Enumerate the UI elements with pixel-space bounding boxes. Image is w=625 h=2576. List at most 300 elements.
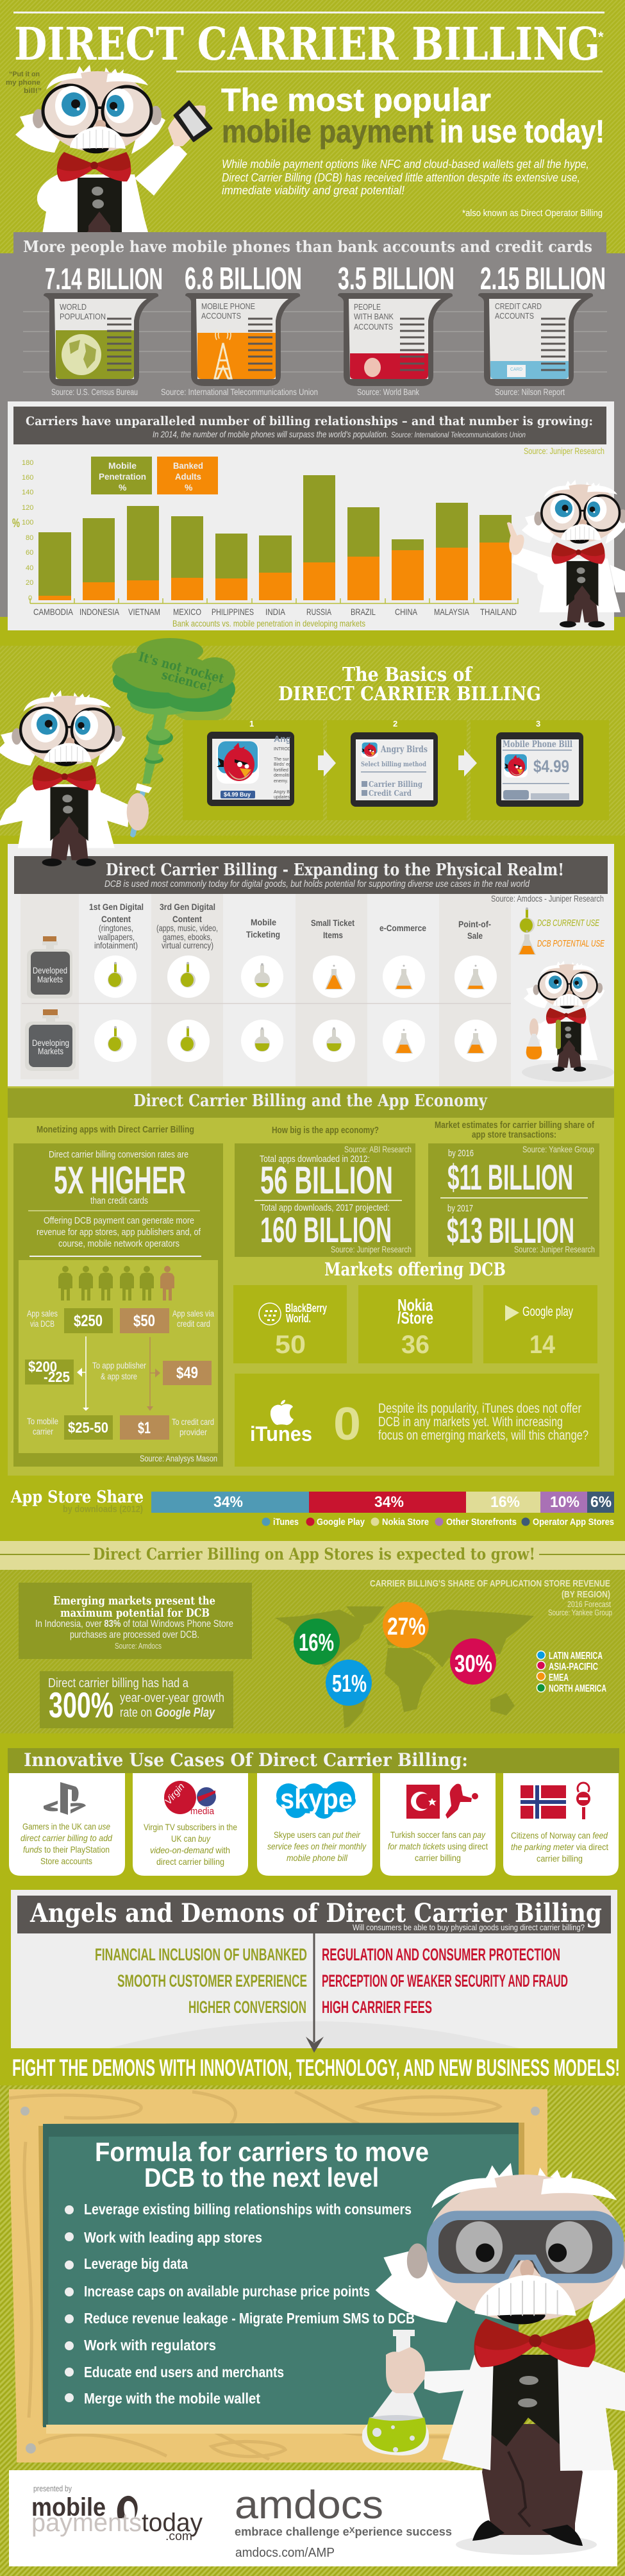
revenue flow diagram: -225 (44, 1368, 70, 1385)
bullet list: Educate end users and merchants (84, 2364, 284, 2380)
chart source: Source: Juniper Research (524, 446, 604, 456)
column headers: (ringtones, (99, 923, 133, 933)
people icons (58, 1266, 174, 1301)
stat: mobile phone accounts: ACCOUNTS (201, 311, 241, 321)
asterisk: * (598, 29, 604, 45)
box: app economy size: Source: ABI Research (344, 1144, 412, 1154)
stat: 5x higher: 5X HIGHER (54, 1159, 186, 1202)
card: skype (257, 1773, 372, 1876)
country labels: MALAYSIA (434, 607, 470, 617)
country labels: MEXICO (173, 607, 201, 617)
scientist with flasks (524, 961, 604, 1072)
heading bar: Direct Carrier Billing - Expanding to the Physical Realm! (106, 861, 564, 880)
stat: people with bank accounts (338, 262, 454, 397)
step 1: INTROD (274, 747, 291, 752)
stacked bar: 34% (213, 1494, 243, 1511)
box: monetizing apps (13, 1143, 223, 1467)
basics heading: DIRECT CARRIER BILLING (278, 683, 541, 705)
icon: turkish flag and player (406, 1784, 478, 1819)
revenue flow diagram (19, 1260, 218, 1453)
region bubbles: 16% (299, 1629, 334, 1656)
legend: mobile penetration: Mobile (108, 460, 137, 471)
box: monetizing apps: revenue for app stores, app publishers and, of (37, 1227, 201, 1238)
revenue flow diagram: & app store (101, 1371, 137, 1381)
scientist with goggles and flask (362, 2163, 625, 2555)
region legend (537, 1651, 606, 1694)
heading bar (14, 856, 608, 894)
card: norway parking: the parking meter via direct (511, 1842, 608, 1852)
column headers: Content (101, 914, 131, 924)
stat: mobile phone accounts: Source: International Telecommunications Union (161, 387, 318, 397)
step 1: Angry Bi (274, 790, 291, 795)
step 1 (207, 719, 294, 806)
card: playstation: funds to their PlayStation (23, 1844, 110, 1855)
market: google play: Google play (522, 1304, 573, 1319)
bullet list (65, 2201, 415, 2407)
country labels: VIETNAM (128, 607, 160, 617)
region bubbles: 30% (454, 1651, 492, 1678)
panel: billing relationships chart (8, 401, 614, 630)
footer: sponsors (9, 2470, 617, 2566)
revenue flow diagram: via DCB (30, 1318, 54, 1329)
legend: potential use (518, 930, 605, 955)
step 2 (351, 719, 438, 807)
market: nokia store: /Store (397, 1308, 433, 1327)
intro paragraph (222, 158, 589, 197)
heading bar: Innovative Use Cases Of Direct Carrier Billing: (24, 1749, 468, 1771)
stat: credit card accounts: CREDIT CARD (495, 301, 542, 311)
heading bar: DCB is used most commonly today for digital goods, but holds potential for supporting diverse use cases in the real world (104, 879, 530, 889)
market: blackberry world: 50 (275, 1331, 306, 1359)
board (43, 2123, 519, 2434)
icon: skype logo: skype (280, 1783, 353, 1815)
card: playstation (9, 1773, 125, 1876)
card: skype: Skype users can put their (274, 1830, 361, 1840)
icon: virgin media logo: media (190, 1806, 215, 1817)
revenue flow diagram: To mobile (27, 1416, 58, 1426)
callout: emerging markets (19, 1583, 252, 1659)
box: monetizing apps: than credit cards (90, 1195, 148, 1206)
legend: banked adults: Banked (173, 460, 203, 471)
region bubbles: 27% (387, 1613, 426, 1640)
revenue flow diagram: $250 (74, 1312, 103, 1330)
callout: emerging markets: In Indonesia, over 83% of total Windows Phone Store (35, 1619, 233, 1629)
band: expected to grow: Direct Carrier Billing on App Stores is expected to grow! (93, 1545, 535, 1563)
speech: put it on my phone bill: bill!” (24, 87, 42, 95)
wood frame (9, 2089, 547, 2462)
market: itunes: DCB in any markets yet. With increasing (378, 1415, 563, 1429)
stacked bar (151, 1492, 614, 1513)
speech: put it on my phone bill (6, 71, 42, 95)
column subheads (37, 1120, 595, 1140)
flasks: developing row (94, 1020, 497, 1062)
column headers: e-Commerce (379, 923, 426, 933)
logo: mobile payments today: presented by (33, 2484, 72, 2493)
stacked bar: 34% (374, 1494, 404, 1511)
column headers: infotainment) (94, 940, 138, 950)
stat: world population: POPULATION (60, 312, 106, 321)
panel: app economy (8, 1086, 614, 1476)
card: playstation: direct carrier billing to add (21, 1833, 113, 1843)
card: skype: service fees on their monthly (267, 1841, 367, 1851)
panel: phones vs bank accounts (0, 232, 625, 617)
intro paragraph: Direct Carrier Billing (DCB) has received little attention despite its extensive use, (222, 171, 580, 184)
step 1: Ang (274, 734, 291, 744)
markets offering heading: Markets offering DCB (324, 1259, 506, 1280)
bullet list: Reduce revenue leakage - Migrate Premium SMS to DCB (84, 2310, 415, 2327)
market: blackberry world: World. (286, 1312, 311, 1325)
legend (262, 1517, 614, 1528)
scientist pointing at chart (507, 480, 625, 628)
logo: amdocs: perience success (354, 2525, 452, 2538)
stat: credit card accounts: ACCOUNTS (495, 311, 534, 321)
revenue flow diagram: App sales (27, 1308, 58, 1318)
bottle: developed markets: Markets (37, 974, 63, 984)
card: virgin media: Virgin TV subscribers in the (144, 1822, 237, 1832)
chart title: carrier billing share by region (370, 1578, 612, 1617)
legend: Google Play (317, 1517, 365, 1528)
box: market estimates: Source: Juniper Research (514, 1244, 595, 1254)
stat: credit card accounts (478, 262, 606, 397)
column headers: Small Ticket (311, 918, 354, 928)
column headers (89, 902, 491, 950)
legend: mobile penetration: % (119, 482, 127, 492)
chart caption: Bank accounts vs. mobile penetration in developing markets (172, 618, 365, 628)
stat: credit card accounts: CARD (510, 367, 522, 372)
country labels: BRAZIL (351, 607, 376, 617)
step 1: 1 (249, 719, 254, 728)
country labels: THAILAND (480, 607, 517, 617)
footnote: *also known as Direct Operator Billing (462, 208, 603, 219)
box: monetizing apps: Source: Analysys Mason (140, 1453, 217, 1463)
stat: world population: Source: U.S. Census Bureau (51, 387, 138, 397)
heading: More people have mobile phones than bank accounts and credit cards (23, 237, 592, 256)
step 2: 2 (393, 719, 397, 728)
region legend: EMEA (549, 1672, 569, 1683)
revenue flow diagram: App sales via (172, 1308, 214, 1318)
speech: put it on my phone bill: “Put it on (9, 71, 40, 78)
scientist with phone (15, 65, 212, 270)
revenue flow diagram: carrier (33, 1426, 53, 1436)
column headers: Ticketing (246, 929, 280, 939)
box: app economy size: 160 BILLION (260, 1209, 392, 1250)
world map (275, 1606, 534, 1728)
box: app economy size: Total app downloads, 2017 projected: (260, 1202, 390, 1213)
arrow (458, 749, 477, 777)
box: app economy size: 56 BILLION (260, 1159, 393, 1202)
chart heading bar: Source: International Telecommunications Union (391, 430, 526, 439)
region legend: ASIA-PACIFIC (549, 1662, 598, 1672)
card: turkish soccer: Turkish soccer fans can pay (390, 1830, 486, 1840)
stat: world population: WORLD (60, 302, 87, 312)
cloud text: It's not rocket (137, 649, 226, 686)
column headers: 3rd Gen Digital (160, 902, 215, 912)
heading bar (8, 1748, 619, 1773)
column headers: Point-of- (458, 919, 491, 929)
revenue flow diagram: To credit card (172, 1417, 214, 1427)
box: monetizing apps: course, mobile network operators (58, 1238, 179, 1249)
cloud text: science! (160, 667, 213, 695)
step 1: The sur (274, 757, 289, 762)
column headers: (apps, music, video, (156, 923, 218, 933)
angels list (95, 1945, 307, 2017)
revenue flow diagram: credit card (177, 1318, 210, 1329)
card: norway parking: Citizens of Norway can feed (511, 1830, 608, 1840)
bars (38, 475, 512, 600)
market: blackberry world (233, 1285, 347, 1363)
panel: expanding to the physical realm (8, 844, 614, 1086)
section: app store share: App Store Share (10, 1488, 144, 1507)
step 1: updates (274, 795, 290, 800)
heading bar: Will consumers be able to buy physical goods using direct carrier billing? (353, 1923, 585, 1932)
revenue flow diagram: $50 (133, 1312, 155, 1330)
revenue flow diagram: $1 (138, 1419, 151, 1437)
angels list: SMOOTH CUSTOMER EXPERIENCE (117, 1971, 307, 1991)
logo: mobile payments today: payments (31, 2509, 142, 2537)
revenue flow diagram: $200 (28, 1358, 57, 1375)
column headers: virtual currency) (162, 940, 213, 950)
stat: world population: 7.14 BILLION (45, 262, 163, 296)
stat: world population (44, 262, 163, 397)
card: turkish soccer: for match tickets using direct (388, 1841, 488, 1851)
y axis: 80 (26, 534, 33, 542)
logo: mobile payments today: today (142, 2509, 203, 2537)
header (13, 12, 604, 219)
card: norway parking: carrier billing (537, 1853, 583, 1864)
step 2: Angry Birds (380, 745, 428, 755)
icon: flask (362, 2330, 429, 2455)
bullet list: Merge with the mobile wallet (84, 2390, 260, 2407)
card: norway parking (503, 1773, 619, 1876)
market: google play: 14 (529, 1331, 556, 1359)
country labels: CAMBODIA (33, 607, 74, 617)
column subheads: app store transactions: (472, 1129, 556, 1140)
stacked bar: 16% (490, 1494, 520, 1511)
logo: amdocs: embrace challenge e (235, 2525, 348, 2538)
heading bar: Direct Carrier Billing and the App Economy (133, 1091, 488, 1111)
step 3: Mobile Phone Bill (503, 739, 572, 750)
y axis: 160 (22, 474, 33, 482)
y axis: 140 (22, 489, 33, 496)
legend: iTunes (273, 1517, 299, 1528)
flasks: developed row (94, 955, 497, 998)
y axis: 180 (22, 459, 33, 467)
stat: people with bank accounts: Source: World Bank (357, 387, 420, 397)
logo: mobile payments today: mobile (31, 2493, 106, 2521)
board heading: Formula for carriers to move (95, 2137, 429, 2167)
arrow (318, 749, 336, 777)
step 1: enemy. (274, 779, 288, 784)
callout: 300 percent growth: Direct carrier billing has had a (48, 1676, 189, 1690)
bottle: developing markets (25, 1009, 76, 1071)
stat: people with bank accounts: 3.5 BILLION (338, 262, 454, 296)
stat: credit card accounts: Source: Nilson Report (495, 387, 565, 397)
market: blackberry world: BlackBerry (285, 1302, 327, 1315)
logo: mobile payments today (31, 2484, 203, 2543)
box: app economy size (235, 1143, 415, 1257)
thought cloud: it's not rocket science (112, 638, 235, 784)
box: monetizing apps: Direct carrier billing conversion rates are (49, 1149, 188, 1160)
callout: emerging markets: maximum potential for DCB (60, 1606, 210, 1620)
bottle: developed markets (27, 936, 72, 998)
card: virgin media: video-on-demand with (150, 1845, 230, 1855)
market: itunes: 0 (333, 1399, 361, 1450)
logo: amdocs: amdocs (235, 2483, 383, 2527)
logo: mobile payments today: .com (165, 2530, 192, 2543)
board heading: DCB to the next level (144, 2162, 379, 2193)
callout: emerging markets: purchases are processed over DCB. (70, 1629, 199, 1640)
country labels: INDONESIA (79, 607, 120, 617)
callout: 300 percent growth: 300% (49, 1685, 113, 1725)
revenue flow diagram: $49 (176, 1364, 198, 1382)
card: virgin media (133, 1773, 248, 1876)
logo: amdocs (235, 2483, 452, 2560)
bullet list: Work with leading app stores (84, 2229, 262, 2246)
logo: amdocs: amdocs.com/AMP (235, 2546, 335, 2560)
column headers: games, ebooks, (163, 932, 212, 942)
callout: emerging markets: Emerging markets present the (53, 1594, 215, 1608)
legend: banked adults: % (185, 482, 193, 492)
stat: mobile phone accounts: MOBILE PHONE (201, 301, 255, 311)
board heading (95, 2137, 429, 2193)
market: nokia store (358, 1285, 472, 1363)
step 2: Select billing method (361, 761, 426, 768)
callout: 300 percent growth: year-over-year growth (120, 1691, 224, 1705)
card: turkish soccer (380, 1773, 496, 1876)
column headers: 1st Gen Digital (89, 902, 144, 912)
chart title: carrier billing share by region: 2016 Forecast (567, 1599, 611, 1609)
section: app store share: by downloads (2012) (63, 1504, 143, 1515)
step 3 (496, 719, 583, 807)
step 1: Birds' eg (274, 762, 291, 767)
revenue flow diagram: provider (179, 1427, 207, 1437)
chart heading bar: Carriers have unparalleled number of billing relationships – and that number is growing: (26, 414, 593, 428)
box: market estimates: by 2017 (447, 1203, 473, 1214)
box: app economy size: Total apps downloaded in 2012: (260, 1154, 370, 1165)
stat: mobile phone accounts: 6.8 BILLION (185, 262, 302, 296)
step 2: Carrier Billing (369, 780, 423, 789)
legend: banked adults: Adults (175, 471, 201, 482)
revenue flow diagram: To app publisher (92, 1360, 146, 1370)
market: nokia store: Nokia (397, 1295, 433, 1315)
box: market estimates: by 2016 (448, 1148, 474, 1159)
step 3: $4.99 (533, 757, 569, 776)
card: skype: mobile phone bill (287, 1853, 348, 1863)
y axis: 120 (22, 504, 33, 512)
market: nokia store: 36 (401, 1331, 429, 1359)
card: turkish soccer: carrier billing (415, 1853, 461, 1863)
column headers: Items (323, 930, 343, 940)
column headers: Content (172, 914, 202, 924)
revenue flow diagram: $25-50 (68, 1419, 108, 1436)
column subheads: How big is the app economy? (272, 1125, 379, 1136)
step 1: fortified (274, 768, 288, 773)
bottle: developing markets: Markets (38, 1046, 63, 1056)
legend: mobile penetration: Penetration (99, 471, 146, 482)
section: innovative use cases (8, 1748, 619, 1876)
chart title: carrier billing share by region: (BY REGION) (562, 1589, 610, 1600)
icon: playstation logo (44, 1782, 86, 1815)
country labels: INDIA (265, 607, 286, 617)
y axis: 60 (26, 549, 33, 557)
stat: mobile phone accounts (161, 262, 318, 397)
market: itunes: iTunes (250, 1422, 312, 1445)
panel: angels and demons (11, 1890, 617, 2048)
country labels: PHILIPPINES (212, 607, 254, 617)
legend: Other Storefronts (446, 1517, 517, 1528)
bullet list: Increase caps on available purchase price points (84, 2283, 370, 2300)
speech: put it on my phone bill: my phone (6, 79, 40, 87)
icon: apple (271, 1400, 294, 1425)
region bubbles (294, 1602, 496, 1706)
step 2: Credit Card (369, 789, 412, 798)
stat: people with bank accounts: ACCOUNTS (354, 322, 393, 332)
demons list: HIGH CARRIER FEES (322, 1998, 432, 2017)
step 3: 3 (536, 719, 540, 728)
column subheads: Monetizing apps with Direct Carrier Billing (37, 1124, 194, 1135)
band: expected to grow (0, 1541, 625, 1570)
legend: banked adults (157, 457, 218, 494)
section: app store share (10, 1488, 614, 1528)
subtitle line 2: mobile payment (222, 114, 433, 149)
country labels: CHINA (395, 607, 418, 617)
card: virgin media: direct carrier billing (156, 1856, 224, 1867)
bullet list: Leverage big data (84, 2255, 188, 2272)
chart heading bar: In 2014, the number of mobile phones will surpass the world's population. (153, 429, 388, 439)
y axis (12, 459, 33, 602)
bullet list: Work with regulators (84, 2337, 216, 2353)
region bubbles: 51% (332, 1671, 367, 1697)
market: itunes (235, 1374, 599, 1467)
y axis: 20 (26, 579, 33, 587)
column headers: wallpapers, (97, 932, 135, 942)
panel: three steps (183, 719, 609, 820)
box: market estimates: Source: Yankee Group (522, 1144, 594, 1154)
angels list: HIGHER CONVERSION (188, 1998, 306, 2017)
stat: people with bank accounts: WITH BANK (354, 312, 394, 321)
intro paragraph: While mobile payment options like NFC and cloud-based wallets get all the hype, (222, 158, 589, 171)
floor shadow (522, 1063, 614, 1082)
callout: emerging markets: Source: Amdocs (115, 1641, 162, 1651)
legend: current use (519, 907, 600, 933)
y axis: 40 (26, 564, 33, 572)
column headers: Sale (467, 930, 483, 941)
country labels: RUSSIA (306, 607, 331, 617)
callout: 300 percent growth (40, 1671, 233, 1728)
icon: virgin media logo (163, 1781, 216, 1817)
basics heading (278, 664, 541, 705)
step 1: demoliti (274, 773, 290, 778)
icon: virgin media logo: Virgin (163, 1781, 187, 1807)
card: playstation: Gamers in the UK can use (22, 1821, 110, 1831)
bottle: developing markets: Developing (32, 1038, 69, 1048)
stacked bar: 10% (550, 1494, 579, 1511)
legend: Operator App Stores (533, 1517, 614, 1528)
card: playstation: Store accounts (40, 1856, 92, 1866)
angels list: FINANCIAL INCLUSION OF UNBANKED (95, 1945, 307, 1964)
chart heading bar (13, 407, 606, 444)
subtitle line 1: The most popular (221, 82, 491, 118)
heading bar (8, 1088, 614, 1118)
icon: norwegian flag and parking meter (521, 1783, 591, 1819)
arrow: down to fight banner (306, 1933, 324, 2053)
legend: Nokia Store (382, 1517, 429, 1528)
legend: mobile penetration (91, 457, 152, 494)
chalkboard (9, 2089, 547, 2462)
stat: people with bank accounts: PEOPLE (354, 302, 381, 312)
y axis: 100 (22, 519, 33, 526)
callout: 300 percent growth: rate on Google Play (120, 1706, 215, 1720)
